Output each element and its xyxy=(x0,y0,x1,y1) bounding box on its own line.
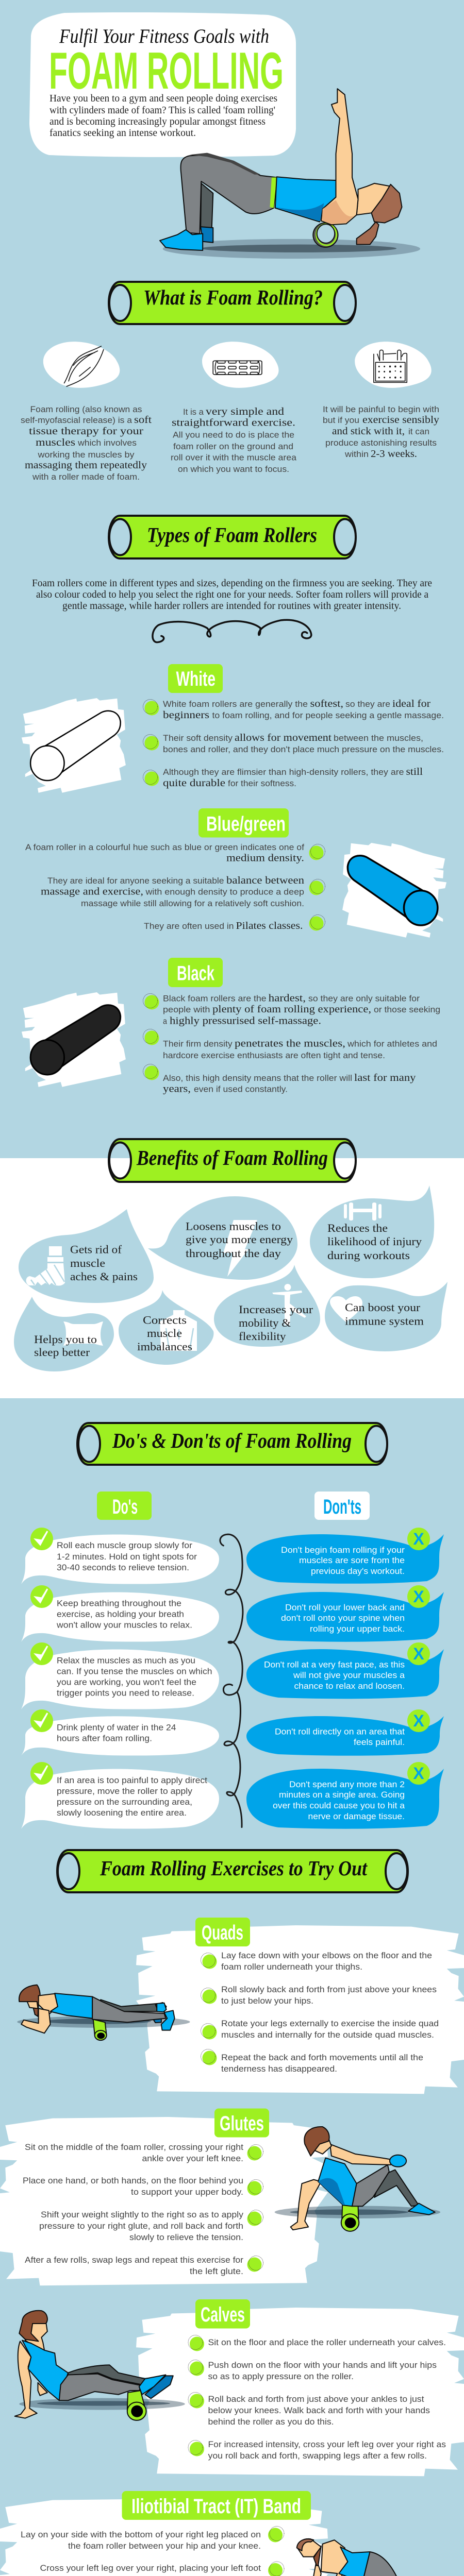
text block: results: within xyxy=(344,450,369,459)
benefit: aches and pains: muscle xyxy=(70,1257,105,1269)
bullets and text: They are ideal for anyone seeking a suitable xyxy=(47,876,224,886)
bullets and text: Their firm density xyxy=(163,1040,233,1049)
bullets and text: for their softness. xyxy=(228,779,296,788)
bullets and text: so they are xyxy=(345,700,390,709)
icon: black foam roller xyxy=(22,992,126,1087)
label: iliotibial tract band xyxy=(122,2491,311,2520)
benefit: immune system: Can boost your xyxy=(345,1301,421,1314)
bullets and text: A foam roller in a colourful hue such as blue or green indicates one of xyxy=(25,843,304,852)
bullets and text: softest, xyxy=(310,698,343,709)
panel: do 3 xyxy=(21,1642,219,1709)
bullets and text xyxy=(25,843,325,931)
bullets and text: plenty of foam rolling experience, xyxy=(212,1004,371,1015)
benefit: immune system: immune system xyxy=(345,1315,424,1327)
panel: do 4: Drink plenty of water in the 24 xyxy=(57,1723,176,1733)
bullets and steps: you roll back and forth, swapping legs after a few rolls. xyxy=(208,2451,427,2461)
bullets and steps xyxy=(188,2335,446,2461)
text block: what it is: muscles xyxy=(36,437,75,448)
paint patch xyxy=(136,1925,464,2094)
bullets and text: so they are only suitable for xyxy=(308,994,420,1004)
bullets and text: last for many xyxy=(354,1072,416,1083)
panel: do 3: trigger points you need to release. xyxy=(57,1689,194,1698)
bullets and text: medium density. xyxy=(226,852,304,863)
section header: exercises to try out: Foam Rolling Exercises to Try Out xyxy=(100,1856,368,1880)
intro text: and is becoming increasingly popular amongst fitness xyxy=(49,116,266,127)
bullets and steps: Cross your left leg over your right, placing your left foot xyxy=(40,2564,261,2573)
bullets and text: ideal for xyxy=(392,698,430,709)
paint patch xyxy=(0,2499,328,2576)
icon: white foam roller xyxy=(22,698,126,793)
bullets and text: highly pressurised self-massage. xyxy=(170,1015,321,1026)
benefit: aches and pains: aches & pains xyxy=(70,1270,138,1283)
icon: cross xyxy=(407,1642,430,1665)
benefit: sleep better: Helps you to xyxy=(34,1333,97,1346)
icon: dumbbell xyxy=(344,1202,382,1221)
benefit: muscle imbalances xyxy=(119,1290,213,1365)
text block: what it is: massaging them repeatedly xyxy=(25,460,147,471)
label: glutes xyxy=(214,2108,269,2137)
label: white xyxy=(168,664,223,693)
section header: types of foam rollers xyxy=(109,516,356,558)
intro text: with cylinders made of foam? This is called 'foam rolling' xyxy=(49,105,275,116)
benefit: mobility: mobility & xyxy=(239,1316,291,1329)
text block: what it is: with a roller made of foam. xyxy=(32,472,140,482)
panel: don't 5: Don't spend any more than 2 xyxy=(289,1780,405,1789)
icon: pillow xyxy=(63,1321,103,1346)
illustration: man on side with roller xyxy=(289,2539,455,2576)
panel: do 2: Keep breathing throughout the xyxy=(57,1599,181,1608)
icon: foam roller on white blob xyxy=(202,342,279,388)
icon: cross xyxy=(407,1709,430,1732)
bullets and text: massage and exercise, xyxy=(41,886,143,897)
text block: simple exercise xyxy=(171,406,297,474)
icon: cross: X xyxy=(413,1530,424,1548)
bullets and text: allows for movement xyxy=(235,732,332,743)
bullets and steps: Lay on your side with the bottom of your right leg placed on xyxy=(21,2530,261,2539)
label: quads xyxy=(195,1918,250,1946)
text block: what it is: which involves xyxy=(77,438,137,448)
bullets and text: Although they are flimsier than high-density rollers, they are xyxy=(163,768,404,777)
benefit: reduces injury: Reduces the xyxy=(327,1222,388,1234)
section header: what is foam rolling xyxy=(109,282,356,324)
benefit: muscle imbalances: Corrects xyxy=(143,1314,187,1326)
icon: check xyxy=(30,1585,53,1608)
text block: what it is: Foam rolling (also known as xyxy=(30,405,142,414)
label: don'ts xyxy=(314,1492,370,1520)
text block: types intro: gentle massage, while harder rollers are intended for routines with greater intensity. xyxy=(62,600,401,612)
label: iliotibial tract band: Iliotibial Tract (IT) Band xyxy=(131,2495,301,2518)
bullets and text: massage while still allowing for a relatively soft cushion. xyxy=(81,899,304,908)
bullets and text: years, xyxy=(163,1083,191,1094)
text block: simple exercise: It is a xyxy=(183,408,204,417)
panel: title card xyxy=(29,12,296,157)
text block: types intro: Foam rollers come in different types and sizes, depending on the firmness you are seeking. They are xyxy=(32,578,432,589)
benefit: more energy: Loosens muscles to xyxy=(186,1220,281,1232)
bullets and steps: muscles and internally for the outside quad muscles. xyxy=(221,2030,434,2040)
bullets and text: with enough density to produce a deep xyxy=(145,887,304,896)
panel: don't 1: Don't begin foam rolling if your xyxy=(281,1546,405,1555)
title: fulfil your fitness goals with: Fulfil Your Fitness Goals with xyxy=(59,25,269,47)
benefit: mobility: Increases your xyxy=(239,1303,313,1316)
panel: don't 1: previous day's workout. xyxy=(311,1567,405,1576)
paint patch xyxy=(0,2117,328,2285)
label: do's: Do's xyxy=(112,1496,138,1518)
panel: do 2 xyxy=(21,1585,219,1642)
label: do's xyxy=(97,1492,152,1520)
bullets and text: balance between xyxy=(226,875,304,886)
bullets and text: beginners xyxy=(163,709,209,721)
bullets and text: hardcore exercise enthusiasts are often tight and tense. xyxy=(163,1051,385,1060)
panel: white roller xyxy=(22,664,444,793)
bullets and text: Their soft density xyxy=(163,734,233,743)
panel: do 5: pressure on the surrounding area, xyxy=(57,1798,192,1807)
panel: glutes xyxy=(0,2108,440,2285)
text block: what it is: soft xyxy=(134,414,152,426)
panel: don't 4: Don't roll directly on an area that xyxy=(275,1727,405,1737)
benefit: more energy: throughout the day xyxy=(186,1247,281,1260)
bullets and steps: behind the roller as you do this. xyxy=(208,2417,334,2427)
panel: do 5: pressure, move the roller to apply xyxy=(57,1787,193,1796)
icon: muscle on white blob xyxy=(43,342,120,388)
label: black: Black xyxy=(177,962,215,985)
bullets and steps: to just below your hips. xyxy=(221,1996,313,2006)
bullets and steps: so as to apply pressure on the roller. xyxy=(208,2372,354,2381)
illustration: woman bridge on foam roller xyxy=(160,89,420,259)
benefit: muscle imbalances: muscle xyxy=(147,1327,182,1340)
section header: what is foam rolling: What is Foam Rolling? xyxy=(143,285,323,309)
panel: don't 3: chance to relax and loosen. xyxy=(294,1682,405,1691)
bullets and steps xyxy=(23,2143,263,2276)
label: blue/green: Blue/green xyxy=(206,813,286,836)
bullets and text: a xyxy=(163,1017,168,1026)
text block: what it is: self-myofascial release) is a xyxy=(21,416,132,425)
icon: bandaged foot xyxy=(26,1246,65,1285)
benefit: aches and pains xyxy=(19,1209,154,1303)
bullets and steps: foam roller underneath your thighs. xyxy=(221,1962,362,1972)
icon: check xyxy=(30,1642,53,1665)
text block: what it is: tissue therapy for your xyxy=(29,426,143,437)
bullets and steps: Roll back and forth from just above your ankles to just xyxy=(208,2395,424,2404)
icon: cross: X xyxy=(413,1645,424,1663)
title: foam rolling: FOAM ROLLING xyxy=(49,42,284,100)
bullets and text: Also, this high density means that the roller will xyxy=(163,1074,352,1083)
label: calves: Calves xyxy=(201,2303,245,2326)
text block: simple exercise: very simple and xyxy=(206,406,284,417)
text block: types intro xyxy=(32,578,432,612)
icon: check xyxy=(30,1528,53,1550)
benefit: reduces injury xyxy=(310,1185,434,1278)
panel: don't 5: over this could cause you to hit a xyxy=(273,1801,405,1810)
panel: do 1: 1-2 minutes. Hold on tight spots for xyxy=(57,1552,197,1562)
panel: don't 2: rolling your upper back. xyxy=(310,1624,405,1634)
panel: do 5: slowly loosening the entire area. xyxy=(57,1808,187,1818)
label: glutes: Glutes xyxy=(220,2112,264,2135)
section header: types of foam rollers: Types of Foam Rollers xyxy=(147,523,317,547)
text block: results xyxy=(323,405,439,460)
bullets and text: which for athletes and xyxy=(347,1040,437,1049)
panel: blue/green roller xyxy=(25,808,446,938)
illustration: woman sitting on roller xyxy=(275,2127,440,2231)
bullets and text: even if used constantly. xyxy=(194,1085,288,1094)
bullets and text: penetrates the muscles, xyxy=(235,1038,345,1049)
panel: don't 4 xyxy=(246,1709,444,1756)
benefit: sleep better xyxy=(14,1297,114,1371)
bullets and steps xyxy=(201,1951,439,2074)
panel: iliotibial band xyxy=(0,2491,455,2576)
panel: don't 2 xyxy=(246,1585,444,1642)
icon: calendar on white blob xyxy=(355,342,432,388)
panel: do 1: Roll each muscle group slowly for xyxy=(57,1541,193,1550)
section header: do's and don'ts xyxy=(77,1423,387,1465)
panel: don't 5 xyxy=(246,1762,444,1829)
bullets and steps: Roll slowly back and forth from just above your knees xyxy=(221,1985,437,1994)
benefit: reduces injury: likelihood of injury xyxy=(327,1235,422,1248)
panel: quads xyxy=(17,1918,464,2094)
panel: don't 2: Don't roll your lower back and xyxy=(285,1603,405,1613)
panel: black roller xyxy=(22,958,440,1094)
text block: results: It will be painful to begin with xyxy=(323,405,439,414)
icon: heart xyxy=(330,1296,362,1322)
section header: do's and don'ts: Do's & Don'ts of Foam Rolling xyxy=(112,1429,352,1452)
bullets and steps: to support your upper body. xyxy=(131,2188,243,2197)
bullets and steps: Lay face down with your elbows on the floor and the xyxy=(221,1951,432,1960)
bullets and steps: below your knees. Walk back and forth with your hands xyxy=(208,2406,430,2415)
bullets and steps: Shift your weight slightly to the right so as to apply xyxy=(41,2210,244,2219)
section header: benefits of foam rolling: Benefits of Foam Rolling xyxy=(136,1146,328,1170)
text block: results: produce astonishing results xyxy=(325,438,437,448)
bullets and text: They are often used in xyxy=(144,922,234,931)
panel: do 3: Relax the muscles as much as you xyxy=(57,1656,195,1665)
benefit: sleep better: sleep better xyxy=(34,1346,90,1359)
text block: simple exercise: foam roller on the ground and xyxy=(173,442,293,451)
intro text: fanatics seeking an intense workout. xyxy=(49,127,196,139)
icon: cross xyxy=(407,1528,430,1550)
panel: do 3: you are working, you won't feel the xyxy=(57,1678,196,1687)
bullets and text: bones and roller, and they don't place much pressure on the muscles. xyxy=(163,745,444,754)
bullets and steps: Repeat the back and forth movements until all the xyxy=(221,2053,423,2062)
panel: do 4 xyxy=(21,1709,219,1756)
bullets and steps xyxy=(20,2527,284,2576)
bullets and text: or those seeking xyxy=(374,1005,440,1014)
bullets and steps: Rotate your legs externally to exercise the inside quad xyxy=(221,2019,439,2028)
text block: simple exercise: on which you want to focus. xyxy=(178,465,289,474)
intro text: Have you been to a gym and seen people doing exercises xyxy=(49,93,277,104)
bullets and text: hardest, xyxy=(269,992,306,1004)
bullets and steps: the left glute. xyxy=(190,2267,243,2276)
label: calves xyxy=(195,2299,250,2329)
panel: do 3: can. If you tense the muscles on which xyxy=(57,1667,212,1676)
text block: what it is xyxy=(21,405,152,482)
icon: cross: X xyxy=(413,1711,424,1730)
intro text xyxy=(49,93,277,139)
text block: results: and stick with it, xyxy=(332,426,405,437)
panel: do 5 xyxy=(21,1762,219,1829)
panel: do 1: 30-40 seconds to relieve tension. xyxy=(57,1563,189,1572)
bullets and text: White foam rollers are generally the xyxy=(163,700,308,709)
bullets and steps: Place one hand, or both hands, on the floor behind you xyxy=(23,2176,243,2185)
bullets and steps: Sit on the floor and place the roller underneath your calves. xyxy=(208,2338,446,2347)
section header: exercises to try out xyxy=(57,1850,408,1892)
icon: cross xyxy=(407,1585,430,1608)
panel: calves xyxy=(15,2299,464,2476)
central squiggle divider xyxy=(220,1534,243,1827)
icon: yoga pose xyxy=(272,1284,306,1325)
text block: results: 2-3 weeks. xyxy=(371,448,417,460)
bullets and text: Black foam rollers are the xyxy=(163,994,267,1004)
bullets and steps: tenderness has disappeared. xyxy=(221,2064,337,2074)
benefit: aches and pains: Gets rid of xyxy=(70,1243,122,1256)
bullets and steps: Sit on the middle of the foam roller, crossing your right xyxy=(25,2143,243,2152)
bullets and steps: Push down on the floor with your hands and lift your hips xyxy=(208,2361,437,2370)
text block: results: but if you xyxy=(323,416,359,425)
text block: results: exercise sensibly xyxy=(362,414,439,426)
icon: vest xyxy=(160,1310,197,1351)
panel: don't 1: muscles are sore from the xyxy=(299,1556,405,1565)
illustration: woman on roller under thighs xyxy=(17,1985,190,2040)
label: don'ts: Don'ts xyxy=(323,1496,361,1518)
label: black xyxy=(168,958,223,987)
bullets and steps: ankle over your left knee. xyxy=(142,2154,243,2163)
panel: don't 4: feels painful. xyxy=(354,1738,405,1747)
label: white: White xyxy=(176,668,216,690)
text block: results: it can xyxy=(408,427,429,436)
icon: check xyxy=(30,1709,53,1732)
benefit: mobility: flexibility xyxy=(239,1330,286,1343)
panel: do 5: If an area is too painful to apply direct xyxy=(57,1776,207,1785)
panel: don't 3: Don't roll at a very fast pace, as this xyxy=(264,1660,405,1669)
icon: check xyxy=(30,1762,53,1785)
bullets and text xyxy=(143,698,444,789)
icon: cross xyxy=(407,1762,430,1785)
illustration: woman with roller under calves xyxy=(15,2311,185,2420)
bullets and steps: pressure to your right glute, and roll back and forth xyxy=(39,2222,243,2231)
benefit: mobility xyxy=(214,1265,320,1347)
icon: blue foam roller xyxy=(342,843,446,938)
bullets and text: still xyxy=(406,766,423,777)
panel: don't 1 xyxy=(246,1528,444,1584)
bullets and text: quite durable xyxy=(163,777,225,789)
benefit: more energy: give you more energy xyxy=(186,1233,293,1246)
bullets and text: people with xyxy=(163,1005,210,1014)
label: blue/green xyxy=(198,808,289,838)
bullets and text xyxy=(143,992,440,1094)
panel: don't 3: will not give your muscles a xyxy=(293,1671,405,1680)
paint patch xyxy=(136,2308,464,2476)
bullets and text: to foam rolling, and for people seeking a gentle massage. xyxy=(212,711,444,720)
icon: cross: X xyxy=(413,1587,424,1606)
panel: don't 5: nerve or damage tissue. xyxy=(308,1812,405,1821)
bullets and text: between the muscles, xyxy=(334,734,423,743)
panel: do 2: exercise, as holding your breath xyxy=(57,1609,184,1619)
text block: simple exercise: roll over it with the muscle area xyxy=(171,453,297,463)
panel: do 2: won't allow your muscles to relax. xyxy=(56,1621,192,1630)
benefit: more energy xyxy=(148,1196,297,1280)
section header: benefits of foam rolling xyxy=(109,1139,356,1182)
decorative scroll flourish xyxy=(153,620,311,642)
icon: lightning bolt xyxy=(223,1220,257,1277)
text block: types intro: also colour coded to help you select the right one for your needs. Softer foam rollers will provide a xyxy=(36,589,428,600)
bullets and steps: After a few rolls, swap legs and repeat this exercise for xyxy=(25,2256,244,2265)
panel: don't 3 xyxy=(246,1642,444,1699)
panel: do 4: hours after foam rolling. xyxy=(57,1734,152,1743)
benefit: reduces injury: during workouts xyxy=(327,1249,410,1262)
bullets and steps: For increased intensity, cross your left leg over your right as xyxy=(208,2440,446,2449)
icon: cross: X xyxy=(413,1764,424,1783)
panel: don't 2: don't roll onto your spine when xyxy=(281,1614,405,1623)
panel: don't 5: minutes on a single area. Going xyxy=(279,1790,405,1800)
benefit: immune system xyxy=(325,1282,448,1351)
label: quads: Quads xyxy=(202,1922,243,1944)
text block: simple exercise: straightforward exercise. xyxy=(172,417,295,429)
bullets and steps: slowly to relieve the tension. xyxy=(129,2233,243,2242)
text block: simple exercise: All you need to do is place the xyxy=(173,431,294,440)
bullets and text: Pilates classes. xyxy=(236,920,303,931)
panel: do 1 xyxy=(21,1528,219,1584)
benefit: muscle imbalances: imbalances xyxy=(137,1340,192,1353)
text block: what it is: working the muscles by xyxy=(37,450,135,460)
bullets and steps: the foam roller between your hip and your knee. xyxy=(68,2541,261,2551)
